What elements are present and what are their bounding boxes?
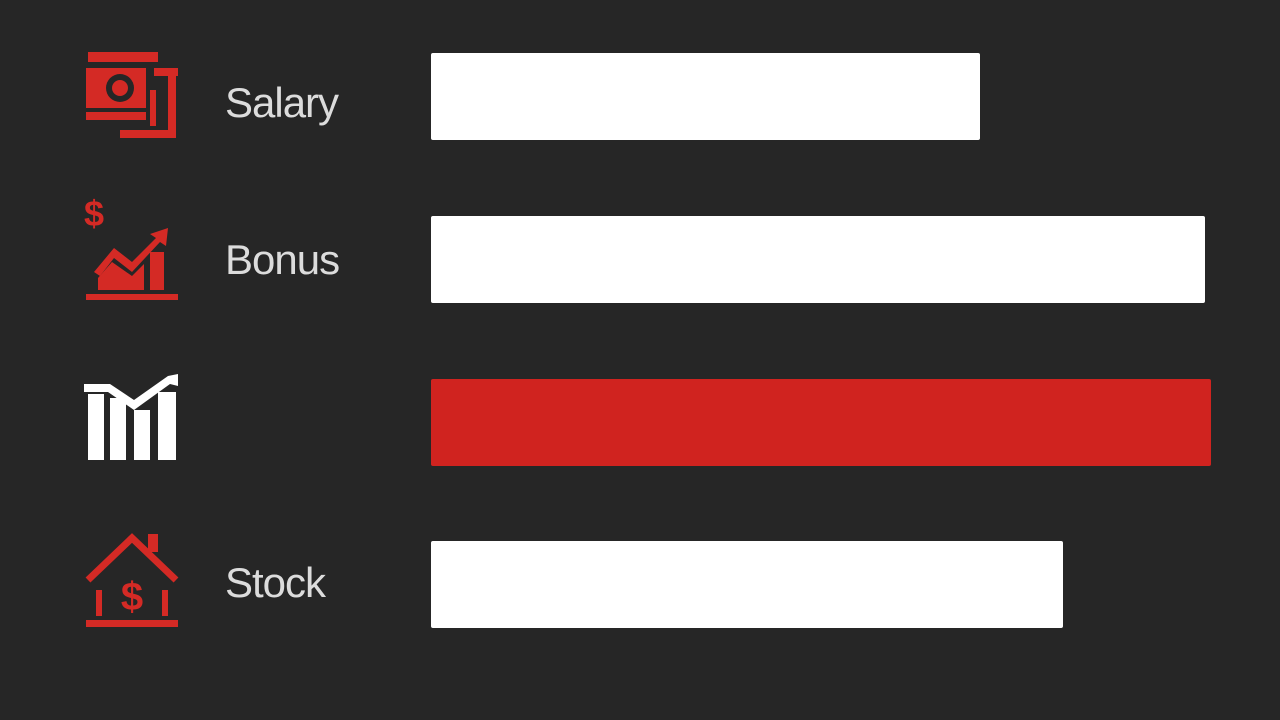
bar: Salary [431, 53, 980, 140]
label: Stock: Stock [225, 559, 325, 606]
bar: Stock [431, 541, 1063, 628]
icon: salary money [86, 52, 178, 138]
icon: bonus chart [84, 193, 178, 300]
bar: highlighted red [431, 379, 1211, 466]
bar: Bonus [431, 216, 1205, 303]
icon: stock house: $ [121, 575, 143, 619]
label: Bonus: Bonus [225, 236, 339, 283]
icon: white chart [84, 374, 178, 460]
icon: bonus chart: $ [84, 193, 104, 234]
icon: stock house [86, 533, 178, 627]
label: Salary: Salary [225, 79, 338, 126]
